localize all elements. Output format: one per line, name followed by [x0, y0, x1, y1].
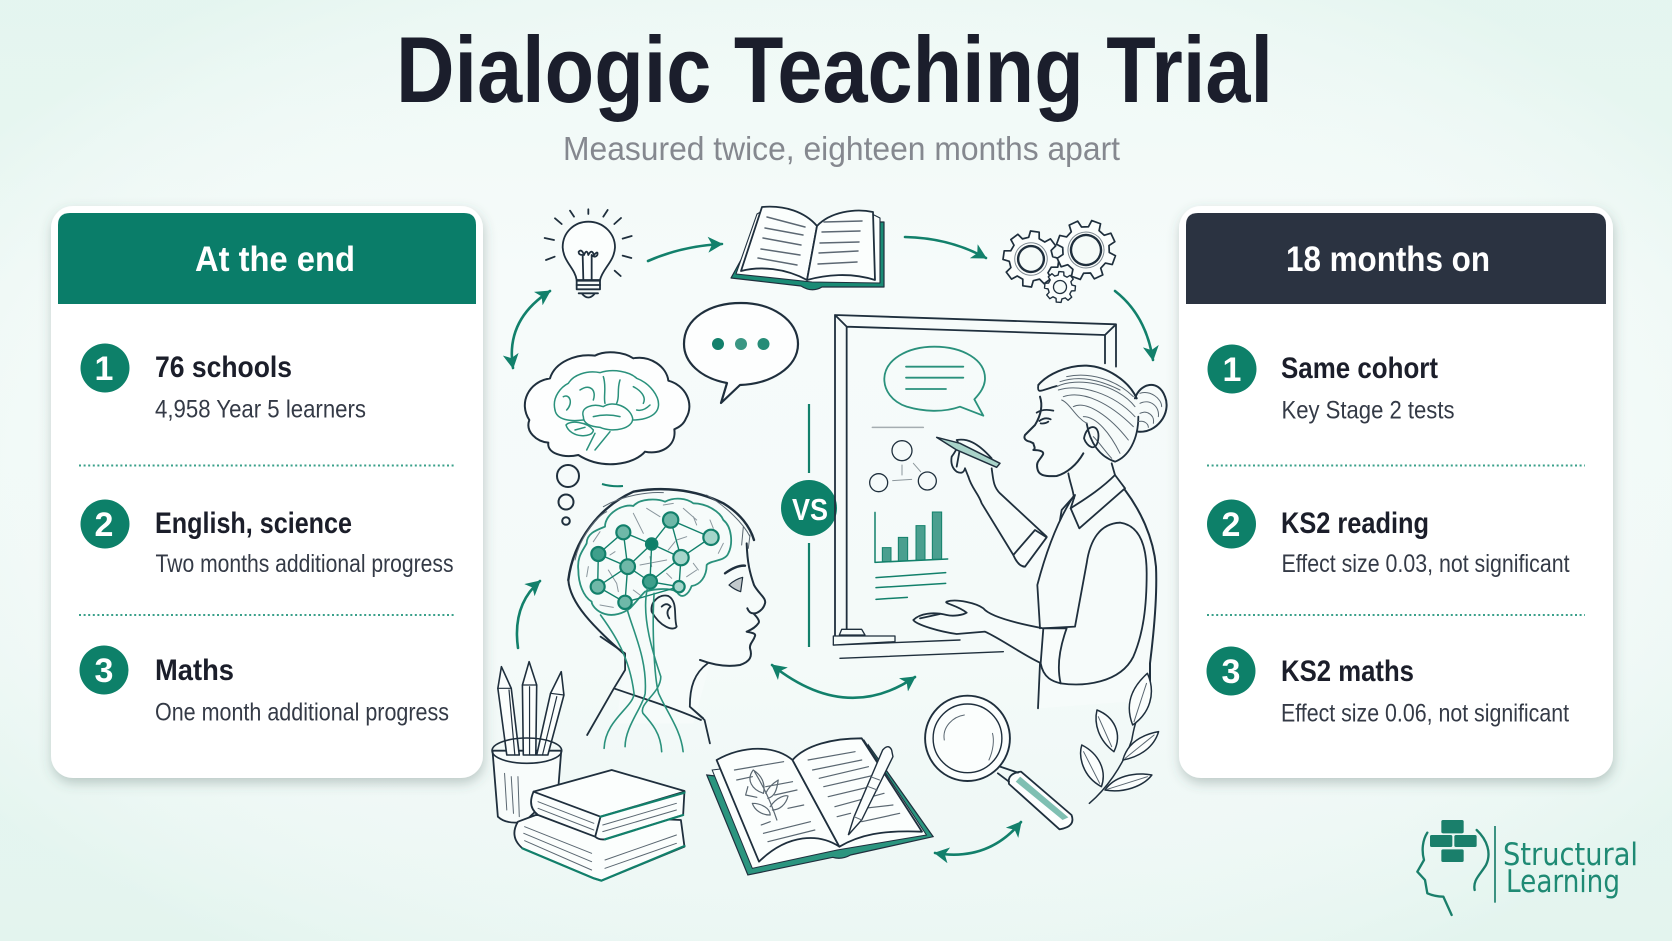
brain network — [578, 499, 731, 615]
item 2: English, science: English, science — [155, 507, 352, 540]
board diagram — [870, 441, 936, 492]
arrow: book and magnifier double — [935, 822, 1021, 855]
item 3: Maths: 3 — [95, 652, 113, 690]
item 3: KS2 maths: 3 — [1222, 653, 1240, 691]
item 2: KS2 reading: 2 — [1222, 506, 1240, 544]
panel: at the end — [51, 206, 483, 778]
icon: thought cloud with brain — [525, 352, 689, 464]
student neck and nerves — [587, 588, 710, 752]
item 1: 76 schools — [80, 344, 366, 424]
icon: magnifying glass — [925, 696, 1072, 829]
item 2: English, science — [80, 500, 454, 578]
item 1: same cohort: Key Stage 2 tests — [1282, 396, 1454, 424]
item 1: 76 schools: 1 — [95, 350, 113, 388]
icon: open book top — [731, 207, 884, 290]
panel heading: 18 months on: 18 months on — [1286, 240, 1490, 279]
item 3: KS2 maths — [1206, 646, 1569, 728]
title: Dialogic Teaching Trial — [396, 17, 1273, 122]
item 3: Maths: One month additional progress — [155, 698, 449, 726]
panel heading: at the end: At the end — [195, 240, 355, 279]
item 2: English, science: Two months additional progress — [156, 550, 454, 578]
panel heading: 18 months on — [1186, 213, 1606, 304]
item 3: Maths — [80, 646, 449, 726]
plant sketch — [746, 770, 788, 820]
item 1: same cohort: 1 — [1223, 351, 1241, 389]
icon: speech bubble with dots — [684, 303, 798, 403]
icon: leaf sprig — [1081, 673, 1159, 803]
panel heading: at the end — [58, 213, 476, 304]
icon: teacher — [913, 366, 1167, 708]
panel: 18 months on — [1179, 206, 1613, 778]
item 2: KS2 reading: Effect size 0.03, not significant — [1282, 550, 1570, 578]
item 1: 76 schools: 4,958 Year 5 learners — [155, 396, 366, 424]
arrow: books to student — [517, 581, 540, 648]
item 3: KS2 maths: Effect size 0.06, not significant — [1281, 700, 1569, 728]
item 1: same cohort: Same cohort — [1281, 352, 1438, 385]
accent stroke above head — [602, 484, 623, 486]
icon: brain — [554, 371, 659, 450]
subtitle: Measured twice, eighteen months apart — [563, 130, 1120, 167]
item 3: Maths: Maths — [155, 654, 234, 687]
icon: light bulb — [545, 209, 632, 297]
logo: Structural Learning: Learning — [1506, 864, 1620, 900]
icon: open book bottom — [707, 738, 933, 875]
icon: thought bubbles — [557, 465, 579, 525]
board bar chart — [875, 512, 948, 599]
icon: stacked books — [514, 770, 684, 881]
item 1: same cohort — [1208, 344, 1454, 424]
item 2: KS2 reading — [1207, 500, 1570, 578]
item 2: KS2 reading: KS2 reading — [1281, 507, 1429, 540]
item 3: KS2 maths: KS2 maths — [1281, 655, 1414, 688]
arrow: book to gears — [905, 237, 986, 258]
logo: Structural Learning: Structural — [1503, 837, 1638, 873]
icon: vs divider: VS — [792, 492, 828, 527]
logo: Structural Learning — [1417, 820, 1638, 915]
item 1: 76 schools: 76 schools — [155, 351, 292, 384]
icon: pencil cup — [492, 662, 564, 823]
arrow: brain and bulb double — [512, 291, 550, 368]
arrow: bulb to book — [648, 244, 722, 261]
icon: gears — [1000, 212, 1124, 304]
icon: student head with brain network — [568, 489, 765, 723]
arrow: student and teacher double — [772, 665, 915, 698]
icon: vs divider — [781, 404, 837, 647]
board speech bubble — [884, 347, 985, 416]
item 2: English, science: 2 — [95, 506, 113, 544]
arrow: gears to whiteboard — [1115, 291, 1153, 360]
icon: whiteboard — [833, 315, 1116, 658]
logo mark — [1417, 820, 1495, 915]
